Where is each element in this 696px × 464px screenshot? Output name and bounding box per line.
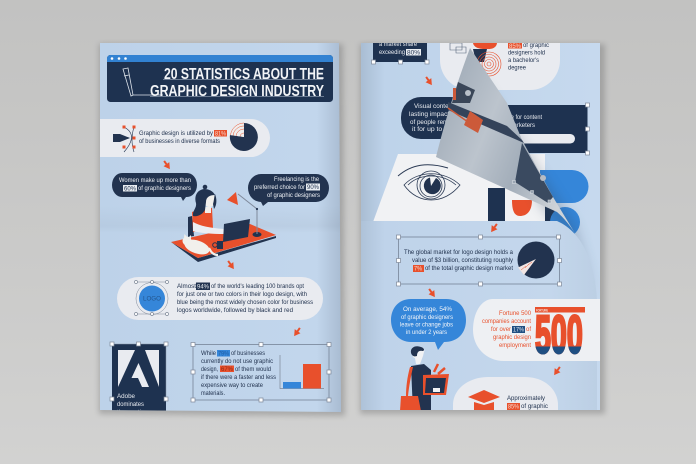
arrow (551, 365, 563, 377)
text: bachelor's degree: designers hold (508, 50, 546, 56)
bubble: leave or change jobs: On average, 54% (403, 306, 453, 313)
panel: diverse formats (100, 119, 270, 157)
arrow (426, 287, 438, 299)
curl: mirrored figure (448, 82, 475, 122)
pie chart: 7% (518, 242, 554, 278)
panel: market share (372, 40, 429, 64)
logo: fortune 500: FORTUNE (536, 308, 548, 312)
text: bachelor's degree: a bachelor's (508, 57, 539, 64)
icon: designer figure (473, 43, 497, 62)
heading: GRAPHIC DESIGN INDUSTRY (150, 83, 324, 100)
right page (361, 35, 600, 414)
icon: monitor (450, 43, 466, 53)
bubble: freelancing: 90% (307, 184, 319, 191)
text: logo colors: Almost (177, 283, 196, 290)
text: graphic design use: materials. (201, 390, 225, 397)
text: graphic design use: While (201, 350, 217, 357)
bubble: leave or change jobs: of graphic designers (401, 314, 453, 321)
text: fortune 500 stat: companies account (482, 318, 531, 325)
curl: dark band (448, 102, 524, 143)
text: bachelor's degree: 85% (509, 43, 521, 50)
bubble: leave or change jobs: leave or change jobs (400, 322, 453, 328)
logo: fortune 500: 500 (535, 305, 583, 365)
page curl (436, 48, 579, 240)
illustration: man with book (400, 346, 449, 412)
bubble: women (112, 173, 197, 201)
icon: eye (398, 165, 460, 200)
icon: logo construction: LOGO (143, 296, 161, 302)
text: fortune 500 stat: 17% (513, 326, 524, 334)
bubble: visual content: lasting impact, 65% (409, 111, 467, 118)
panel: content marketers: for marketers (500, 122, 535, 129)
text: fortune 500 stat: for over (491, 326, 511, 333)
pie chart: 81% (230, 123, 258, 151)
panel: bachelor's degree (440, 43, 560, 90)
bubble: women: Women make up more than (119, 177, 192, 184)
text: 81% of businesses: 81% (215, 130, 226, 137)
illustration: designer at desk (171, 185, 276, 262)
text: graphic design use: of them would (235, 366, 272, 373)
logo: fortune 500: 500 (535, 305, 583, 365)
panel: market share: exceeding (379, 49, 406, 56)
text: bachelor's degree (508, 42, 549, 72)
bar chart (280, 355, 324, 388)
panel: approximately 85%: 85% (508, 404, 519, 410)
text: graphic design use: if there were a faster and less (201, 374, 276, 381)
arrow (425, 76, 432, 86)
icon: pen tool (113, 126, 136, 152)
panel: logo design market (396, 235, 562, 286)
icon: adobe logo (118, 350, 159, 387)
bubble: freelancing: Freelancing is the (274, 176, 320, 183)
text: logo colors: of the world's leading 100 brands opt (211, 283, 304, 290)
text: logo market: value of $3 billion, constituting roughly (412, 257, 514, 264)
text: logo market (404, 249, 514, 272)
heading (150, 68, 324, 96)
bubble: freelancing: of graphic designers (267, 192, 320, 199)
text: fortune 500 stat (482, 310, 532, 349)
panel: adobe: the creative (117, 409, 148, 416)
text: fortune 500 stat: Fortune 500 (499, 310, 532, 317)
icon: graduation cap (468, 390, 500, 412)
bubble: leave or change jobs (391, 299, 466, 350)
left page (100, 43, 341, 416)
bubble: freelancing (248, 174, 329, 206)
text: logo market: 7% (414, 266, 422, 272)
text: logo colors: for just one or two colors in their logo design, with (177, 291, 308, 298)
text: logo colors: logos worldwide, followed by black and red (177, 307, 294, 314)
text: fortune 500 stat: employment (499, 342, 531, 349)
icon: logo construction (134, 280, 168, 316)
curl: red bag (464, 111, 483, 133)
panel: content marketers: Visuals are a staple for content (465, 114, 542, 121)
text: bachelor's degree: of graphic (523, 42, 549, 49)
text: fortune 500 stat: of (526, 326, 531, 333)
text: graphic design use: currently do not use graphic (201, 358, 273, 365)
heading: 20 STATISTICS ABOUT THE (164, 66, 324, 83)
text: graphic design use: expensive way to create (201, 382, 264, 389)
icon: pen (123, 68, 163, 96)
text: graphic design use: of businesses (231, 350, 265, 357)
text: logo colors (177, 282, 313, 314)
bubble: leave or change jobs: in under 2 years (406, 329, 447, 336)
bubble: women: of graphic designers (138, 185, 191, 192)
text: fortune 500 stat: graphic design (493, 334, 532, 341)
text: 81% of businesses (139, 130, 227, 143)
panel: market share: 80% (407, 50, 421, 56)
panel: fortune 500 (473, 299, 600, 365)
text: logo colors: 94% (197, 284, 209, 290)
bubble: visual content: Visual content has (414, 103, 466, 110)
panel: logo colors (117, 277, 323, 320)
title banner (107, 55, 333, 102)
panel: adobe: dominates (117, 401, 144, 408)
bubble: visual content: it for up to 3 days (412, 126, 464, 133)
panel: approximately 85% (453, 377, 558, 414)
panel: eye illustration (373, 154, 588, 237)
bubble: visual content (401, 97, 453, 139)
arrow (163, 160, 170, 170)
panel: adobe: Adobe (117, 393, 136, 400)
panel: market share: a market share (379, 41, 418, 48)
bubble: visual content: of people remember (410, 119, 466, 126)
curl: dark panel (515, 143, 553, 203)
text: logo colors: blue being the most widely chosen color for business (177, 299, 313, 306)
panel: approximately 85%: of graphic (521, 403, 548, 410)
text: logo market: The global market for logo design holds a (404, 249, 514, 256)
arrow (294, 327, 301, 336)
panel: approximately 85%: Approximately (507, 395, 546, 402)
panel: businesses bar chart (191, 342, 331, 402)
bubble: women: 60% (124, 185, 136, 192)
icon: target circles (477, 52, 501, 76)
text: logo market: of the total graphic design market (425, 265, 513, 272)
text: 81% of businesses: Graphic design is utilized by (139, 130, 214, 137)
text: bachelor's degree: degree (508, 64, 527, 72)
arrow (491, 223, 498, 232)
text: graphic design use (201, 350, 276, 397)
text: graphic design use: 79% (218, 350, 229, 358)
shadow under curl (520, 134, 590, 257)
text: graphic design use: design, (201, 366, 218, 373)
panel: adobe (110, 342, 168, 416)
lower page sheet (361, 221, 597, 412)
arrow (227, 260, 234, 270)
text: 81% of businesses: of businesses in diverse formats (139, 138, 220, 145)
panel: content marketers (508, 102, 590, 156)
bubble: freelancing: preferred choice for (254, 184, 305, 191)
text: graphic design use: 67% (221, 366, 233, 373)
